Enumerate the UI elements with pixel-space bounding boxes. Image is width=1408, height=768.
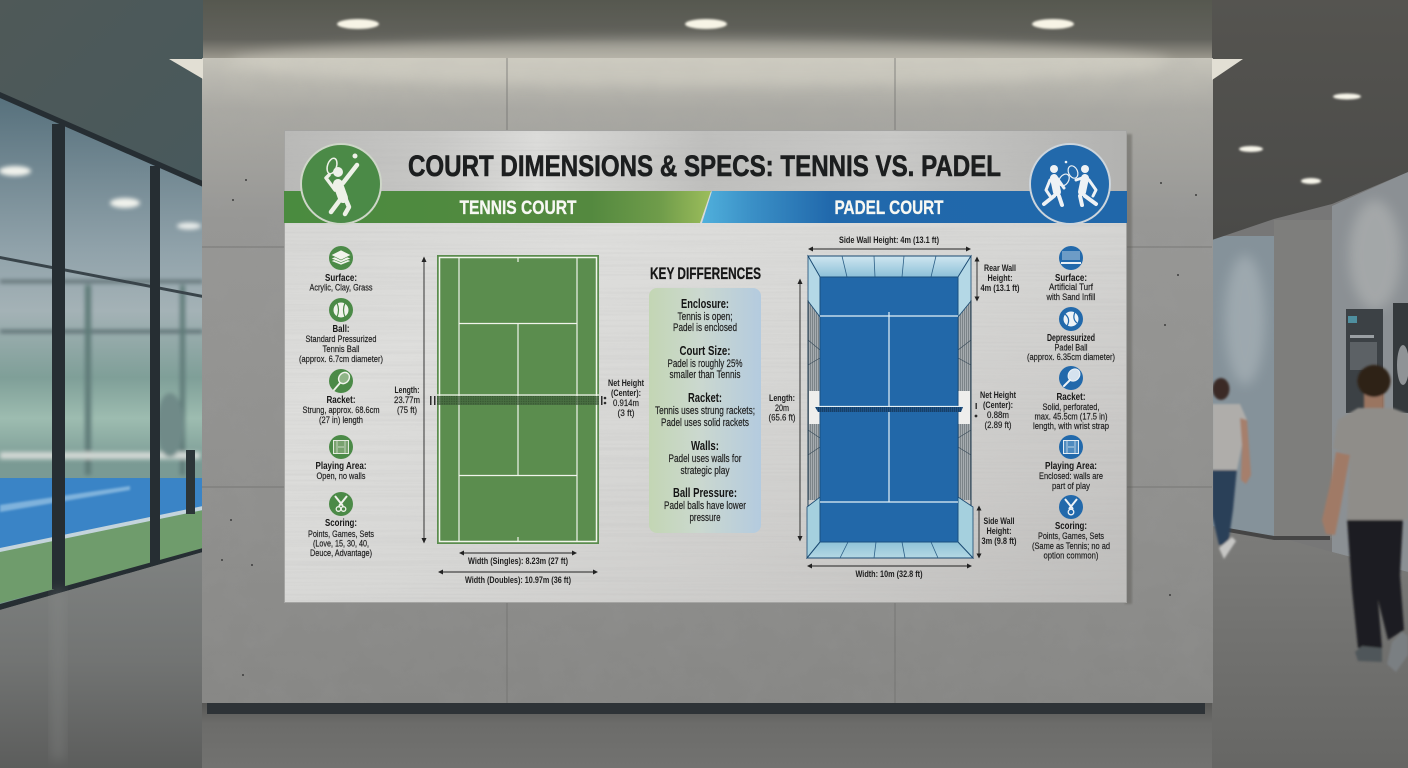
tennis scoring spec: Points, Games, Sets — [308, 529, 374, 540]
tennis scoring spec: (Love, 15, 30, 40, — [313, 538, 369, 550]
court size difference: smaller than Tennis — [670, 369, 741, 381]
front wall label: Height: — [986, 526, 1012, 537]
tennis scoring spec: Deuce, Advantage) — [310, 548, 372, 559]
court boundary line — [0, 506, 203, 552]
left floor — [0, 552, 203, 768]
net height label: Net Height — [980, 390, 1017, 401]
net — [437, 395, 599, 405]
brushed texture — [284, 130, 1127, 603]
walker in distance — [1212, 378, 1251, 559]
padel court heading: PADEL COURT — [834, 198, 944, 219]
net height label: (Center): — [983, 400, 1013, 411]
arm — [1240, 418, 1251, 484]
padel racket spec — [1033, 366, 1109, 432]
padel scoring spec: Points, Games, Sets — [1038, 531, 1104, 542]
length label: Length: — [769, 393, 795, 404]
net height label: (3 ft) — [618, 408, 634, 419]
padel ball spec — [1027, 307, 1115, 363]
top width label: Side Wall Height: 4m (13.1 ft) — [839, 235, 939, 246]
tennis playing area spec: Open, no walls — [316, 471, 366, 482]
shoes — [1355, 646, 1382, 662]
front wall arrow — [976, 506, 982, 558]
tennis scoring spec: Scoring: — [325, 518, 357, 529]
right back wall — [1212, 236, 1275, 536]
icon: padel scoring — [1059, 495, 1083, 519]
icon: tennis racket — [329, 369, 353, 393]
doubles width label: Width (Doubles): 10.97m (36 ft) — [465, 575, 571, 586]
length label — [768, 393, 796, 424]
tennis racket spec: Racket: — [326, 395, 356, 406]
padel surface spec — [1046, 246, 1096, 303]
tennis playing area spec: Playing Area: — [316, 461, 366, 472]
rear top glass wall — [808, 256, 971, 277]
green court surround — [0, 510, 203, 603]
padel playing area spec: Enclosed: walls are — [1039, 471, 1103, 482]
net height label — [608, 378, 645, 419]
ball pressure difference: Padel balls have lower — [664, 500, 746, 512]
baseboard — [1228, 528, 1330, 540]
padel racket spec: max. 45.5cm (17.5 in) — [1034, 412, 1108, 422]
front wall label — [982, 516, 1016, 547]
tie holes — [221, 179, 1197, 676]
tennis ball spec: (approx. 6.7cm diameter) — [299, 354, 383, 365]
pants — [1347, 518, 1404, 648]
floor reflection — [52, 590, 64, 760]
light wash from top — [230, 38, 1170, 86]
tennis court heading: TENNIS COURT — [460, 198, 577, 219]
walls difference: Walls: — [691, 439, 719, 453]
singles width arrow — [459, 550, 577, 556]
front wall label: 3m (9.8 ft) — [982, 536, 1016, 547]
shirt — [1333, 408, 1408, 520]
singles width label: Width (Singles): 8.23m (27 ft) — [468, 556, 568, 567]
panel: key differences — [649, 288, 761, 533]
racket difference: Tennis uses strung rackets; — [655, 405, 755, 417]
net height label: 0.88m — [987, 410, 1009, 421]
tennis ball spec: Standard Pressurized — [306, 334, 376, 345]
ball pressure difference: Ball Pressure: — [673, 486, 737, 500]
tennis racket spec: (27 in) length — [319, 415, 363, 426]
tennis specs column — [299, 246, 383, 559]
tennis court diagram — [430, 255, 606, 544]
court surface — [437, 255, 599, 544]
wall base shadow — [207, 703, 1205, 714]
net end marks — [975, 403, 977, 417]
tennis racket spec: Strung, approx. 68.6cm — [302, 405, 380, 416]
right floor — [1212, 526, 1408, 768]
padel ball spec: Padel Ball — [1054, 342, 1088, 354]
padel scoring spec: Scoring: — [1055, 521, 1087, 532]
tennis banner — [284, 191, 711, 223]
head — [1212, 378, 1230, 400]
panel joints — [202, 58, 1212, 703]
enclosure difference: Enclosure: — [681, 297, 729, 311]
padel specs column — [1027, 246, 1115, 562]
window frame — [0, 92, 203, 610]
neck — [1364, 393, 1384, 411]
panel background — [649, 288, 761, 533]
padel ball spec: (approx. 6.35cm diameter) — [1027, 352, 1115, 363]
length arrow — [798, 278, 802, 542]
ceiling downlights — [337, 19, 1074, 29]
tennis ball spec: Tennis Ball — [322, 344, 360, 355]
width arrow — [807, 564, 972, 568]
court lines — [440, 257, 596, 542]
racket difference: Padel uses solid rackets — [661, 417, 749, 429]
rear wall label: Height: — [988, 273, 1012, 284]
icon: padel ball — [1059, 307, 1083, 331]
rear wall label — [980, 263, 1020, 294]
metal plate — [284, 130, 1127, 603]
court lines — [816, 312, 963, 502]
tennis surface spec: Acrylic, Clay, Grass — [310, 282, 373, 294]
padel racket spec: Racket: — [1056, 392, 1086, 403]
ceiling — [0, 0, 1408, 60]
left ceiling — [0, 0, 203, 185]
concrete wall — [169, 38, 1243, 714]
recessed light ledge right — [1212, 59, 1243, 80]
icon: padel playing area — [1059, 435, 1083, 459]
front wall label: Side Wall — [984, 516, 1014, 527]
plate outline — [284, 130, 1126, 602]
icon: surface layers — [329, 246, 353, 270]
net — [815, 407, 963, 412]
padel surface spec: with Sand Infill — [1046, 292, 1096, 303]
walls difference: Padel uses walls for — [668, 453, 742, 465]
enclosure difference: Tennis is open; — [678, 311, 732, 323]
length label: (65.6 ft) — [768, 412, 796, 424]
ball pressure difference: pressure — [690, 512, 720, 524]
icon: tennis player — [301, 144, 381, 224]
padel racket spec: length, with wrist strap — [1033, 421, 1109, 432]
length label: Length: — [394, 385, 420, 396]
court size difference — [668, 344, 743, 381]
arm — [1322, 452, 1350, 535]
padel court diagram — [807, 256, 973, 558]
far right wall — [1332, 172, 1408, 572]
recessed light ledge left — [169, 59, 203, 79]
padel surface spec: Artificial Turf — [1049, 282, 1093, 293]
key differences heading: KEY DIFFERENCES — [650, 264, 761, 283]
wall face — [202, 58, 1213, 703]
padel playing area spec: part of play — [1052, 481, 1090, 492]
padel racket spec: Solid, perforated, — [1042, 402, 1100, 413]
enclosure difference: Padel is enclosed — [673, 322, 737, 334]
sign panel — [284, 130, 1127, 603]
icon: tennis playing area — [329, 435, 353, 459]
walls difference: strategic play — [680, 465, 730, 477]
padel playing area spec — [1039, 435, 1103, 492]
tennis surface spec — [310, 246, 373, 294]
tennis surface spec: Surface: — [325, 273, 357, 284]
right ceiling — [1212, 0, 1408, 240]
net height label: 0.914m — [613, 398, 639, 409]
tennis ball spec — [299, 298, 383, 365]
length arrow — [422, 256, 426, 544]
green band — [284, 191, 711, 223]
front bottom glass wall — [807, 497, 973, 558]
enclosure difference — [673, 297, 737, 334]
tennis playing area spec — [316, 435, 366, 482]
blue band — [702, 191, 1127, 223]
top width arrow — [808, 246, 971, 252]
icon: tennis ball — [329, 298, 353, 322]
padel scoring spec: option common) — [1044, 550, 1098, 562]
court surface — [820, 277, 958, 542]
court line — [0, 486, 130, 512]
tennis dimensions — [394, 256, 645, 586]
shirt — [1212, 404, 1247, 470]
width label: Width: 10m (32.8 ft) — [856, 569, 922, 580]
padel banner — [702, 191, 1127, 223]
court size difference: Padel is roughly 25% — [668, 358, 743, 370]
net height label: Net Height — [608, 378, 645, 389]
far right wall glow — [1349, 200, 1401, 310]
title: COURT DIMENSIONS & SPECS: TENNIS VS. PADEL — [408, 150, 1001, 183]
blue court — [0, 478, 203, 551]
length label: 20m — [775, 403, 789, 414]
icon: padel racket — [1059, 366, 1083, 390]
walker in foreground — [1322, 365, 1408, 672]
racket difference — [655, 391, 755, 429]
rear wall label: 4m (13.1 ft) — [980, 283, 1020, 294]
padel ball spec: Depressurized — [1047, 333, 1095, 344]
walls difference — [668, 439, 742, 477]
net height label — [980, 390, 1017, 431]
padel scoring spec: (Same as Tennis; no ad — [1032, 541, 1110, 552]
icon: tennis scoring — [329, 492, 353, 516]
padel dimensions — [768, 235, 1020, 580]
length label — [394, 385, 420, 416]
ball pressure difference — [664, 486, 746, 524]
tennis racket spec — [302, 369, 380, 426]
left window with courts beyond — [0, 96, 203, 608]
rear wall arrow — [974, 256, 980, 302]
hair — [1358, 365, 1390, 397]
net post — [186, 450, 195, 514]
net end marks — [430, 396, 606, 405]
rear wall label: Rear Wall — [984, 263, 1016, 274]
shoe — [1219, 537, 1236, 559]
length label: (75 ft) — [397, 405, 417, 416]
icon: padel players — [1030, 144, 1110, 224]
net height label: (2.89 ft) — [984, 420, 1012, 431]
padel playing area spec: Playing Area: — [1045, 461, 1097, 472]
header metal — [284, 130, 1127, 192]
middle floor — [202, 700, 1214, 768]
racket difference: Racket: — [688, 391, 722, 405]
window glass — [0, 96, 203, 608]
right side wall — [958, 256, 971, 507]
sign shadow — [1125, 134, 1132, 604]
net height label: (Center): — [611, 388, 641, 399]
icon: artificial turf — [1059, 246, 1083, 270]
padel surface spec: Surface: — [1055, 273, 1087, 284]
tennis scoring spec — [308, 492, 374, 559]
tennis ball spec: Ball: — [332, 324, 350, 335]
length label: 23.77m — [394, 395, 420, 406]
pants — [1212, 468, 1237, 545]
right wall glow — [1225, 255, 1265, 385]
doubles width arrow — [438, 570, 598, 574]
corridor pillar — [1274, 220, 1332, 538]
wall posters — [1346, 303, 1408, 413]
blurred scene through glass — [0, 166, 203, 475]
padel scoring spec — [1032, 495, 1110, 562]
right ceiling lights — [1239, 94, 1361, 184]
concrete texture — [202, 58, 1213, 703]
court size difference: Court Size: — [680, 344, 730, 358]
left side wall — [808, 256, 820, 507]
